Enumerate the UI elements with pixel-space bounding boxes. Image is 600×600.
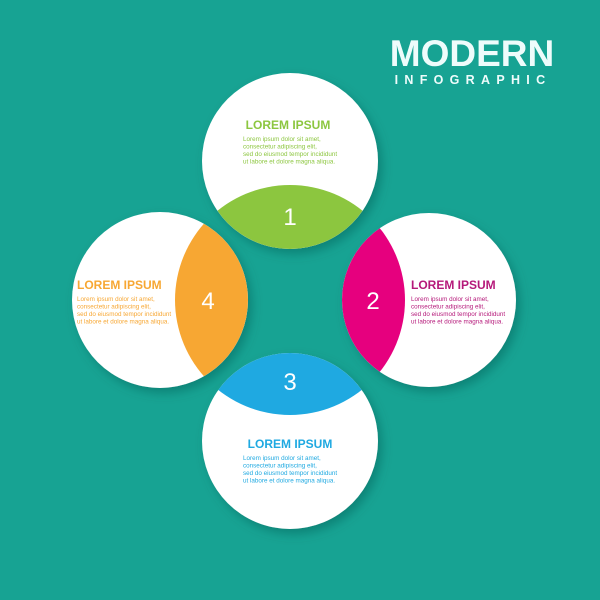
panel: step 4 [72, 212, 248, 388]
panel: step 1: LOREM IPSUM [246, 118, 330, 132]
panel: step 2: LOREM IPSUM [411, 278, 496, 292]
panel: step 3: 3 [283, 369, 297, 396]
panel: step 4: LOREM IPSUM [77, 278, 162, 292]
panel: step 1: sed do eiusmod tempor incididunt [243, 151, 337, 158]
panel: step 4: sed do eiusmod tempor incididunt [77, 311, 171, 318]
panel: step 2: sed do eiusmod tempor incididunt [411, 311, 505, 318]
panel: step 1 [202, 73, 378, 249]
title: INFOGRAPHIC [395, 73, 551, 87]
panel: step 4: consectetur adipiscing elit, [77, 304, 151, 310]
panel: step 2: ut labore et dolore magna aliqua. [411, 318, 503, 326]
panel: step 2: 2 [366, 288, 380, 315]
panel: step 1: Lorem ipsum dolor sit amet, [243, 136, 321, 143]
title: MODERN [390, 33, 554, 74]
panel: step 1: ut labore et dolore magna aliqua. [243, 158, 335, 166]
panel: step 3 [202, 353, 378, 529]
panel: step 1: 1 [283, 204, 297, 231]
panel: step 3: Lorem ipsum dolor sit amet, [243, 455, 321, 462]
panel: step 1: consectetur adipiscing elit, [243, 144, 317, 150]
panel: step 2: Lorem ipsum dolor sit amet, [411, 296, 489, 303]
panel: step 4: ut labore et dolore magna aliqua. [77, 318, 169, 326]
panel: step 4: Lorem ipsum dolor sit amet, [77, 296, 155, 303]
panel: step 3: LOREM IPSUM [248, 437, 332, 451]
panel: step 3: consectetur adipiscing elit, [243, 462, 317, 470]
panel: step 4: 4 [201, 288, 215, 315]
panel: step 3: ut labore et dolore magna aliqua. [243, 478, 335, 484]
panel: step 2: consectetur adipiscing elit, [411, 304, 485, 310]
panel: step 3: sed do eiusmod tempor incididunt [243, 470, 337, 477]
panel: step 2 [342, 213, 516, 387]
